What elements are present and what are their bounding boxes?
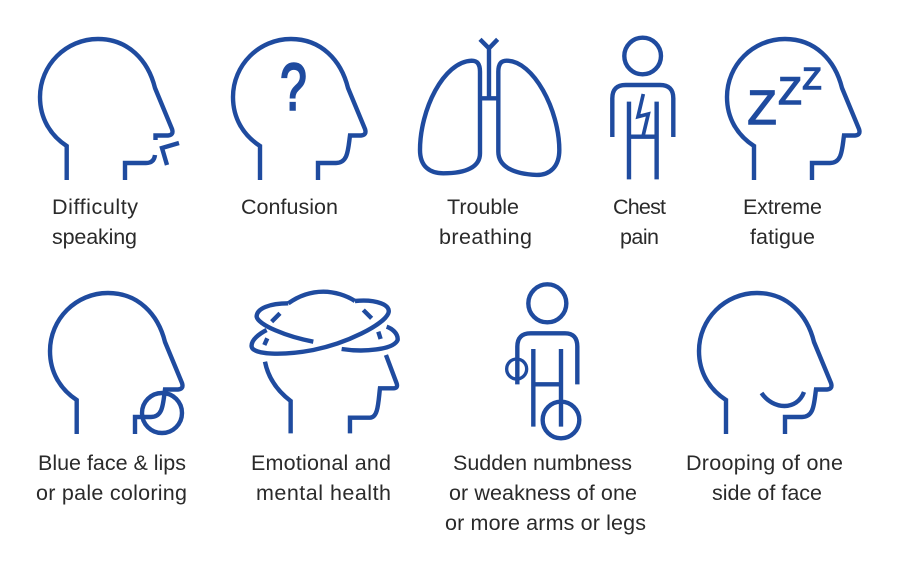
label: emotional and mental health: mental health [256,481,391,505]
label: difficulty speaking: Difficulty [52,195,138,219]
label: sudden numbness: or weakness of one [449,481,637,505]
label: drooping of one side of face: Drooping of one [686,451,843,475]
label: chest pain: Chest [613,195,666,219]
icon: extreme fatigue head: Z [803,61,821,96]
label: difficulty speaking: speaking [52,225,137,249]
icon: extreme fatigue head: Z [747,82,777,135]
label: trouble breathing [439,195,532,249]
label: emotional and mental health: Emotional and [251,451,391,475]
label: chest pain: pain [620,225,659,249]
icon: confusion head: ? [280,51,307,124]
label: sudden numbness [445,451,646,535]
icon: extreme fatigue head: Z [778,71,802,113]
icon: drooping face head [699,293,832,434]
label: extreme fatigue: fatigue [750,225,815,249]
label: drooping of one side of face [686,451,843,505]
icon: extreme fatigue head [727,39,860,180]
label: drooping of one side of face: side of face [712,481,822,505]
label: blue face and lips: Blue face & lips [38,451,186,475]
icon: confusion head [233,39,366,180]
label: blue face and lips: or pale coloring [36,481,187,505]
label: trouble breathing: Trouble [447,195,519,219]
label: emotional and mental health [251,451,391,505]
label: difficulty speaking [52,195,138,249]
label: extreme fatigue: Extreme [743,195,822,219]
label: blue face and lips [36,451,187,505]
icon: difficulty speaking head [40,39,179,180]
icon: chest pain person [612,38,673,179]
label: confusion: Confusion [241,195,338,219]
icon: blue face head [50,293,182,434]
label: sudden numbness: or more arms or legs [445,511,646,535]
icon: emotional and mental health head with orbits [252,292,398,433]
label: extreme fatigue [743,195,822,249]
label: sudden numbness: Sudden numbness [453,451,632,475]
icon: numbness person [507,284,579,438]
icon: lungs [420,39,559,175]
label: chest pain [613,195,666,249]
label: trouble breathing: breathing [439,225,532,249]
